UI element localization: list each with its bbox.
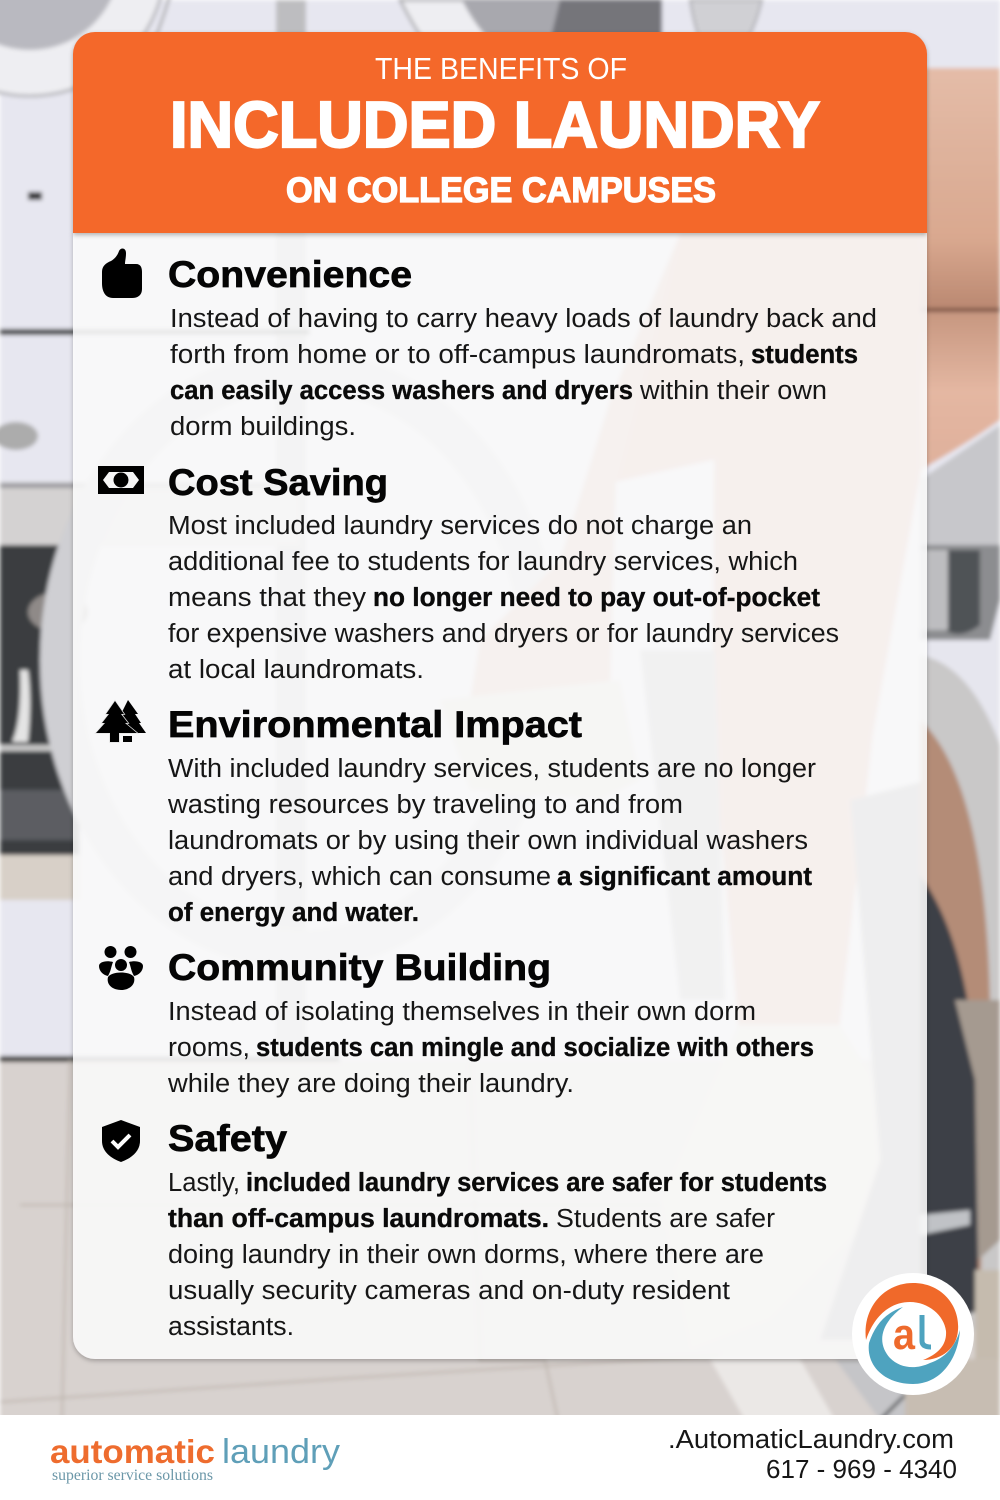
right side: thigh	[920, 68, 1000, 312]
section: cost saving: Most included laundry services do not charge an	[168, 512, 752, 540]
footer bar	[0, 1415, 1000, 1500]
section: community building: students can mingle and socialize with others	[256, 1034, 814, 1062]
icon: shield with check	[102, 1120, 140, 1162]
contact details: .AutomaticLaundry.com	[668, 1426, 954, 1454]
section: convenience: students	[751, 341, 858, 369]
top left washer	[0, 0, 170, 96]
company logo wordmark: automatic	[50, 1433, 215, 1470]
logo badge: al swirl: a	[893, 1310, 915, 1359]
sneaker front	[660, 1025, 905, 1350]
logo badge: al swirl	[852, 1273, 974, 1395]
front leg	[616, 233, 940, 1025]
section: safety: usually security cameras and on-duty resident	[168, 1277, 730, 1305]
company logo wordmark: superior service solutions	[52, 1467, 213, 1484]
section: convenience: dorm buildings.	[170, 413, 356, 441]
top centre washer	[400, 0, 762, 70]
company logo wordmark	[50, 1433, 340, 1484]
rear leg	[470, 233, 680, 700]
section: cost saving: Cost Saving	[168, 462, 388, 503]
section: safety: Students are safer	[556, 1205, 776, 1233]
icon: thumbs up	[102, 249, 142, 298]
section: environmental impact: laundromats or by using their own individual washers	[168, 827, 808, 855]
washer column bar	[276, 0, 306, 1056]
shelf lines	[0, 329, 310, 335]
section: cost saving: for expensive washers and dryers or for laundry services	[168, 620, 839, 648]
section: cost saving: at local laundromats.	[168, 656, 424, 684]
section: environmental impact: of energy and water.	[168, 899, 419, 927]
section: environmental impact: a significant amount	[557, 863, 813, 891]
section: cost saving: additional fee to students for laundry services, which	[168, 548, 798, 576]
section: cost saving: means that they	[168, 584, 366, 612]
section: safety: Safety	[168, 1118, 287, 1159]
section: cost saving: no longer need to pay out-of-pocket	[373, 584, 821, 612]
section: environmental impact: With included laundry services, students are no longer	[168, 755, 817, 783]
section: convenience: Instead of having to carry heavy loads of laundry back and	[170, 305, 877, 333]
section: environmental impact	[96, 700, 817, 927]
icon: pine trees	[96, 700, 146, 742]
header banner: ON COLLEGE CAMPUSES	[286, 171, 716, 210]
section: convenience: forth from home or to off-campus laundromats,	[170, 341, 745, 369]
header banner: THE BENEFITS OF	[375, 51, 627, 86]
icon: banknote	[98, 466, 144, 494]
section: community building	[99, 946, 814, 1098]
panel: translucent content card	[73, 233, 927, 1359]
section: convenience: Convenience	[168, 254, 412, 295]
section: convenience: can easily access washers and dryers	[170, 377, 633, 405]
icon: group of people	[99, 946, 143, 990]
section: environmental impact: wasting resources by traveling to and from	[167, 791, 683, 819]
header banner	[73, 32, 927, 233]
section: community building: rooms,	[168, 1034, 250, 1062]
section: convenience	[102, 249, 877, 441]
sneaker bottom	[710, 1359, 835, 1420]
section: cost saving	[98, 462, 839, 684]
section: community building: while they are doing their laundry.	[167, 1070, 574, 1098]
section: safety: included laundry services are safer for students	[246, 1169, 827, 1197]
section: safety: Lastly,	[168, 1169, 240, 1197]
left washer	[0, 370, 540, 950]
door gray	[640, 650, 725, 1000]
section: environmental impact: and dryers, which can consume	[168, 863, 551, 891]
company logo wordmark: laundry	[222, 1433, 340, 1471]
washer top right	[920, 425, 1000, 560]
section: environmental impact: Environmental Impact	[168, 704, 582, 745]
section: safety: assistants.	[168, 1313, 294, 1341]
section: community building: Community Building	[168, 947, 551, 988]
header banner: INCLUDED LAUNDRY	[170, 88, 820, 161]
section: convenience: within their own	[639, 377, 827, 405]
section: community building: Instead of isolating themselves in their own dorm	[168, 998, 756, 1026]
contact details	[668, 1426, 957, 1484]
section: safety	[102, 1118, 827, 1341]
section: safety: than off-campus laundromats.	[168, 1205, 549, 1233]
contact details: 617 - 969 - 4340	[766, 1456, 957, 1484]
sneaker rear	[440, 680, 640, 800]
floor lines	[0, 1060, 1000, 1420]
section: safety: doing laundry in their own dorms, where there are	[168, 1241, 764, 1269]
